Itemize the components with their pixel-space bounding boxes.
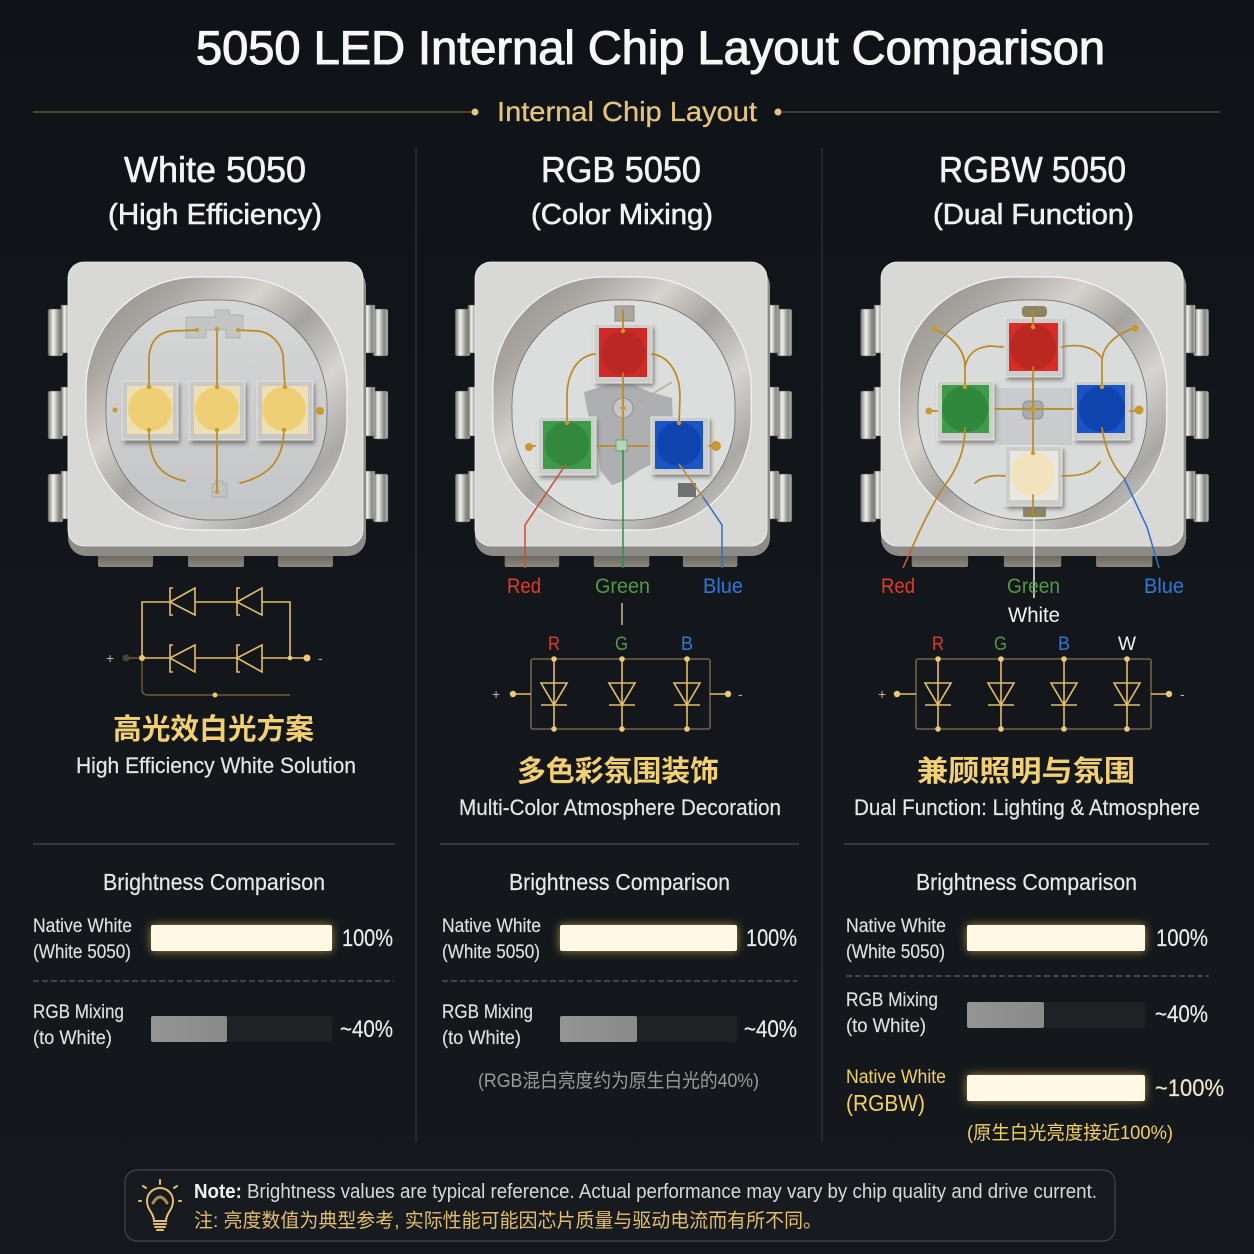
circuit: RGBW diodes: B [1058,634,1070,655]
footnote text: Note: Brightness values are typical reference. Actual performance may vary by chip quality and drive current. [194,1181,1097,1203]
heading: White 5050 [108,149,322,231]
brightness comparison: RGB: RGB Mixing [442,1001,533,1023]
heading: RGB 5050 [531,149,713,231]
bar: native white RGBW ~100% [967,1075,1145,1101]
blue LED chip [1073,381,1130,440]
panel: RGBW 5050 [844,149,1224,1144]
heading: RGB 5050: RGB 5050 [541,149,701,190]
heading: White 5050: (High Efficiency) [108,199,322,231]
brightness comparison: RGBW: (to White) [846,1015,926,1037]
brightness comparison: white: Brightness Comparison [103,869,325,895]
brightness comparison: RGB: (to White) [442,1027,521,1049]
red LED chip [1005,318,1062,377]
brightness comparison: RGBW: ~40% [1155,1001,1208,1028]
channel labels: RGB: Green [595,575,650,598]
circuit: RGB diodes: R [548,634,560,655]
caption: lighting and atmosphere: 兼顾照明与氛围 [917,755,1135,788]
brightness comparison: RGBW: Native White [846,915,946,937]
brightness comparison: white: Native White [33,915,132,937]
brightness comparison: white: (to White) [33,1027,112,1049]
circuit: RGBW diodes: R [932,634,944,655]
note: RGB mixing brightness: (RGB混白亮度约为原生白光的40%) [478,1070,759,1092]
heading: RGBW 5050: (Dual Function) [933,199,1134,231]
circuit: RGB diodes: + [492,686,500,702]
brightness comparison: RGBW: RGB Mixing [846,989,938,1011]
footnote text [194,1181,1097,1232]
circuit: white series-parallel diodes [106,588,323,698]
gold bond wires [149,328,285,492]
channel labels: RGBW: Red [881,575,915,598]
panel: RGB 5050 [440,149,799,1092]
gold bond wires [527,310,717,447]
channel labels: RGBW: White [1008,604,1060,627]
caption: lighting and atmosphere [854,755,1200,820]
circuit: RGBW diodes: - [1180,686,1185,702]
circuit: RGBW diodes [878,634,1185,732]
brightness comparison: RGB: Native White [442,915,541,937]
caption: white solution: High Efficiency White Solution [76,753,356,778]
brightness comparison: RGBW: (RGBW) [846,1090,925,1116]
brightness comparison: RGB: 100% [746,925,797,952]
callout: footnote [125,1170,1115,1241]
panel: White 5050 [33,149,395,1049]
bar: native white 100% [151,925,332,951]
yellow LED chip 3 [257,381,313,440]
circuit: RGB diodes: - [738,686,743,702]
yellow LED chip 2 [189,381,245,440]
diagram: RGBW LED package [861,262,1209,598]
circuit: RGB diodes: G [615,634,628,655]
heading: RGBW 5050: RGBW 5050 [939,149,1126,190]
caption: lighting and atmosphere: Dual Function: Lighting & Atmosphere [854,795,1200,820]
channel labels: RGBW: Green [1007,575,1060,598]
channel labels: RGB: Blue [703,575,743,598]
caption: white solution [76,713,356,778]
brightness comparison: RGBW [846,869,1224,1144]
heading: RGB 5050: (Color Mixing) [531,199,713,231]
title: 5050 LED Internal Chip Layout Comparison [196,21,1105,74]
circuit: RGBW diodes: + [878,686,886,702]
yellow LED chip 1 [122,381,178,440]
channel labels: RGB: Red [507,575,541,598]
circuit: RGB diodes: B [681,634,693,655]
green LED chip [538,417,596,475]
green LED chip [937,381,994,440]
brightness comparison: white: 100% [342,925,393,952]
caption: atmosphere decoration: 多色彩氛围装饰 [517,755,719,788]
heading: White 5050: White 5050 [124,149,306,190]
brightness comparison: white [33,869,394,1049]
brightness comparison: white: ~40% [340,1016,393,1043]
note: native white brightness: (原生白光亮度接近100%) [967,1122,1173,1144]
blue LED chip [651,417,709,474]
brightness comparison: RGBW: (White 5050) [846,941,945,963]
bar: RGB mixing 40% [560,1016,737,1042]
brightness comparison: RGB: (White 5050) [442,941,540,963]
section heading: internal chip layout [33,96,1220,127]
bar: native white 100% [967,925,1145,951]
bar: RGB mixing 40% [967,1002,1145,1028]
circuit: white series-parallel diodes: + [106,650,114,666]
brightness comparison: RGB: ~40% [744,1016,797,1043]
diagram: RGB LED package [455,262,792,625]
circuit: RGBW diodes: G [994,634,1007,655]
circuit: white series-parallel diodes: - [318,650,323,666]
brightness comparison: RGBW: Native White [846,1066,946,1088]
red LED chip [594,324,652,383]
channel labels: RGBW: Blue [1144,575,1184,598]
caption: atmosphere decoration [459,755,781,820]
brightness comparison: RGB: Brightness Comparison [509,869,730,895]
signal traces [903,478,1159,598]
brightness comparison: white: RGB Mixing [33,1001,124,1023]
signal traces [525,450,722,625]
white LED chip [1005,446,1062,506]
bar: RGB mixing 40% [151,1016,332,1042]
heading: RGBW 5050 [933,149,1134,231]
diagram: white LED package [48,262,388,567]
brightness comparison: white: (White 5050) [33,941,131,963]
brightness comparison: RGBW: 100% [1156,925,1208,952]
circuit: RGBW diodes: W [1118,634,1136,655]
icon: light bulb [139,1180,181,1230]
bar: native white 100% [560,925,737,951]
brightness comparison: RGBW: ~100% [1155,1075,1224,1102]
channel labels: RGB [507,575,743,598]
caption: atmosphere decoration: Multi-Color Atmosphere Decoration [459,795,781,820]
brightness comparison: RGBW: Brightness Comparison [916,869,1137,895]
channel labels: RGBW [881,575,1184,627]
caption: white solution: 高光效白光方案 [113,713,314,746]
brightness comparison: RGB [442,869,797,1092]
circuit: RGB diodes [492,634,743,732]
section heading: internal chip layout: Internal Chip Layout [497,96,757,127]
gold bond wires [912,310,1138,548]
footnote text: 注: 亮度数值为典型参考, 实际性能可能因芯片质量与驱动电流而有所不同。 [194,1210,822,1232]
